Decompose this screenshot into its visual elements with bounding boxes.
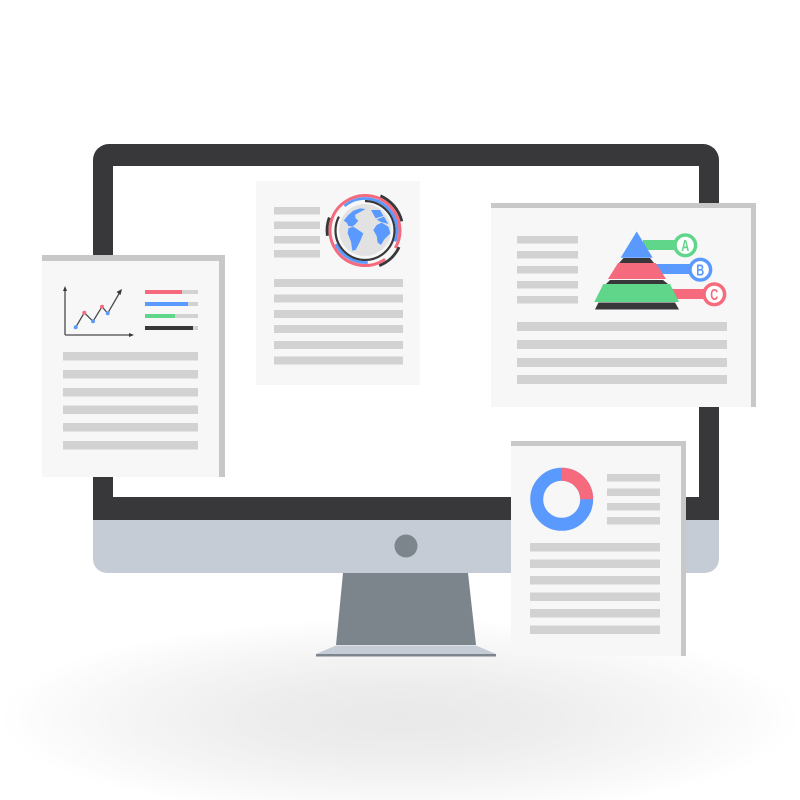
monitor screen: [113, 166, 699, 497]
document: line chart: [42, 255, 225, 477]
donut chart: [537, 474, 587, 524]
short text lines: [517, 236, 578, 304]
short text lines: [274, 207, 320, 258]
monitor chin: [93, 520, 719, 573]
pyramid chart: [594, 232, 725, 310]
monitor bezel: [93, 144, 719, 520]
label A: A: [681, 238, 690, 255]
green tier: [594, 284, 679, 302]
line chart: [63, 286, 134, 337]
red ring: [316, 182, 414, 279]
red tier: [608, 263, 666, 279]
short text lines: [607, 474, 660, 524]
blue tier: [621, 232, 653, 258]
continents: [344, 208, 390, 251]
label B: B: [696, 262, 704, 279]
legend bars: [145, 290, 198, 330]
icon: globe: [314, 180, 416, 281]
long text lines: [517, 322, 727, 384]
monitor: [93, 144, 719, 656]
label C: C: [710, 287, 719, 304]
monitor base: [316, 646, 496, 656]
connector bars: [643, 240, 683, 250]
document: pyramid: [491, 203, 756, 407]
blue arcs: [320, 185, 410, 276]
inner ring: [336, 201, 394, 260]
long text lines: [274, 279, 403, 364]
text lines: [63, 352, 198, 450]
outer black arcs: [314, 180, 416, 281]
monitor button: [394, 534, 418, 558]
long text lines: [530, 543, 660, 634]
ground shadow: [0, 618, 800, 800]
document: globe: [256, 180, 420, 385]
document: donut: [511, 441, 686, 656]
dark pyramid layers: [619, 258, 654, 263]
monitor stand: [336, 573, 476, 645]
